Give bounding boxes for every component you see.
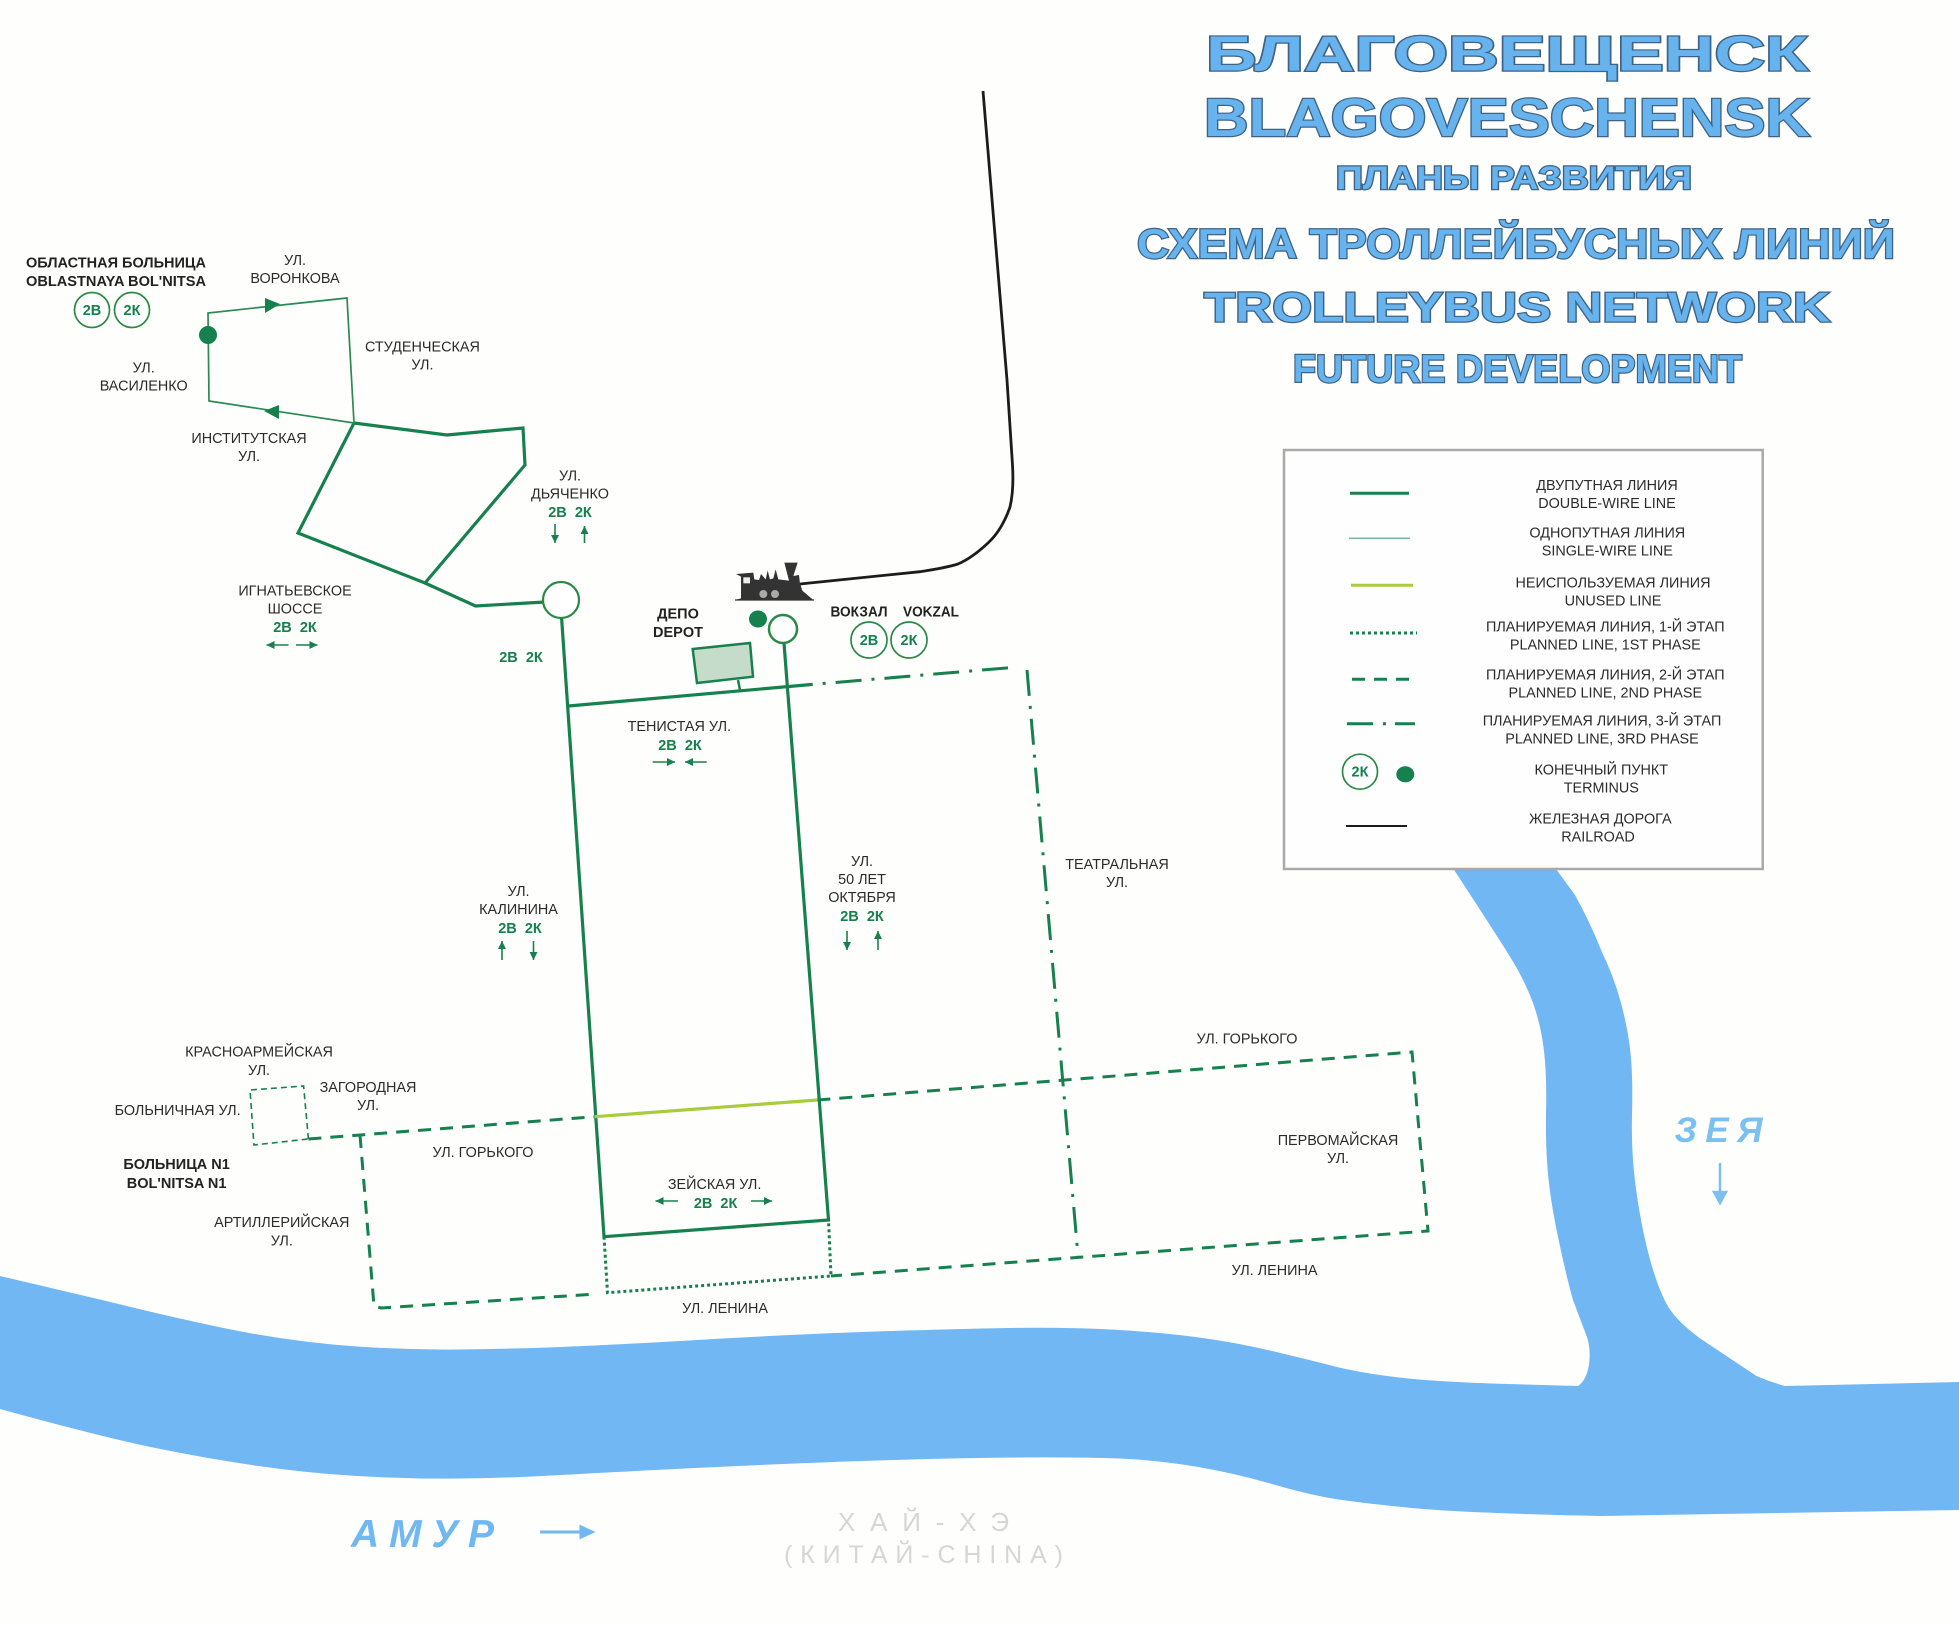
- route badge: 2B at Vokzal: 2В: [860, 633, 878, 649]
- label: Hai-He China: [784, 1507, 1063, 1569]
- route badge: 2B at Vokzal: [851, 622, 887, 658]
- label: Studencheskaya: УЛ.: [411, 358, 433, 374]
- label: Oblastnaya hospital: ОБЛАСТНАЯ БОЛЬНИЦА: [26, 256, 207, 272]
- label: Pervomayskaya: [1278, 1131, 1398, 1167]
- route badge: 2K at hospital: [114, 292, 150, 328]
- title: city name in Russian: БЛАГОВЕЩЕНСК: [1206, 28, 1808, 82]
- label: Depot: [653, 607, 703, 641]
- label: Hospital N1: [123, 1157, 230, 1192]
- planned line 2nd phase: Artilleriyskaya and Lenina west: [360, 1135, 597, 1308]
- terminus circle: Vokzal: [769, 615, 797, 643]
- legend: double-wire line: [1350, 478, 1678, 512]
- legend: unused line: НЕИСПОЛЬЗУЕМАЯ ЛИНИЯ: [1516, 575, 1710, 591]
- legend: single-wire line: ОДНОПУТНАЯ ЛИНИЯ: [1529, 526, 1685, 542]
- legend: railroad: ЖЕЛЕЗНАЯ ДОРОГА: [1529, 811, 1672, 827]
- label: Dyachenko with routes: ДЬЯЧЕНКО: [531, 486, 609, 502]
- route badge: 2B at hospital: 2В: [83, 303, 101, 319]
- legend: single-wire line: [1349, 526, 1685, 559]
- river: Amur and Zeya: [0, 869, 1959, 1516]
- label: Institutskaya: [191, 431, 307, 465]
- heading: network in Russian: СХЕМА ТРОЛЛЕЙБУСНЫХ ЛИНИЙ: [1137, 219, 1895, 267]
- icon: direction arrow on Voronkova: [265, 298, 280, 313]
- label: Pervomayskaya: УЛ.: [1327, 1151, 1349, 1167]
- label: Teatralnaya: УЛ.: [1106, 875, 1128, 891]
- label: Artilleriyskaya: УЛ.: [271, 1234, 293, 1250]
- label: 50 let Oktyabrya with routes: [828, 854, 896, 950]
- legend: terminus: КОНЕЧНЫЙ ПУНКТ: [1535, 760, 1668, 778]
- planned line 2nd phase: Gorkogo east and Pervomayskaya: [817, 1052, 1428, 1276]
- legend: planned line phase 3: PLANNED LINE, 3RD PHASE: [1505, 731, 1699, 747]
- label: Voronkova: [250, 253, 340, 287]
- label: Hospital N1: БОЛЬНИЦА N1: [123, 1157, 230, 1173]
- label: Institutskaya: УЛ.: [238, 449, 260, 465]
- route badge: 2K at hospital: 2К: [124, 303, 141, 319]
- railroad line: [800, 91, 1013, 584]
- label: Zagorodnaya: УЛ.: [357, 1098, 379, 1114]
- label: Dyachenko with routes: УЛ.: [559, 469, 581, 485]
- label: Krasnoarmeyskaya: [185, 1043, 333, 1079]
- legend: terminus: [1342, 754, 1668, 796]
- legend: unused line: UNUSED LINE: [1565, 593, 1661, 609]
- route badge: 2K at Vokzal: 2К: [901, 633, 918, 649]
- planned line 1st phase: Lenina centre: [604, 1220, 831, 1293]
- label: Lenina centre: УЛ. ЛЕНИНА: [682, 1301, 768, 1317]
- title block: [1137, 28, 1895, 391]
- label: Ignatyevskoye highway with routes: 2В 2К: [273, 620, 317, 636]
- title: city name in English: BLAGOVESCHENSK: [1204, 88, 1810, 148]
- legend: terminus: 2К: [1352, 765, 1369, 781]
- label: Hai-He China: ХАЙ-ХЭ: [838, 1507, 1009, 1537]
- label: Kalinina with routes: УЛ.: [507, 884, 530, 900]
- single-wire loop: Oblastnaya hospital: [208, 298, 354, 423]
- legend: unused line: [1351, 575, 1710, 609]
- label: Tenistaya with routes: [628, 719, 731, 762]
- label: Studencheskaya: [365, 340, 480, 374]
- route badge: 2B at hospital: [74, 292, 110, 328]
- subtitle: development plans: ПЛАНЫ РАЗВИТИЯ: [1336, 160, 1692, 196]
- panel: legend: [1284, 450, 1763, 869]
- legend: single-wire line: SINGLE-WIRE LINE: [1542, 543, 1673, 559]
- label: Bolnichnaya: БОЛЬНИЧНАЯ УЛ.: [115, 1103, 241, 1119]
- label: 50 let Oktyabrya with routes: 2В 2К: [840, 909, 884, 925]
- label: Vokzal: VOKZAL: [903, 605, 959, 621]
- label: Vasilenko: ВАСИЛЕНКО: [100, 379, 188, 395]
- label: Depot: ДЕПО: [657, 607, 699, 623]
- legend: planned line phase 2: [1352, 665, 1725, 701]
- legend: planned line phase 2: ПЛАНИРУЕМАЯ ЛИНИЯ, 2-Й ЭТАП: [1486, 665, 1725, 683]
- label: Kalinina with routes: КАЛИНИНА: [479, 902, 558, 918]
- route label on Kalinina upper: 2В 2К: [499, 650, 543, 666]
- legend: railroad: [1346, 811, 1672, 846]
- label: Zeyskaya with routes: ЗЕЙСКАЯ УЛ.: [668, 1175, 761, 1193]
- label: Teatralnaya: ТЕАТРАЛЬНАЯ: [1065, 857, 1169, 873]
- label: Dyachenko with routes: 2В 2К: [548, 505, 592, 521]
- label: Artilleriyskaya: АРТИЛЛЕРИЙСКАЯ: [214, 1213, 349, 1231]
- double-wire loop: north-west network: [298, 423, 525, 583]
- icon: steam locomotive: [735, 563, 814, 600]
- label: Dyachenko with routes: [531, 469, 609, 543]
- heading: network in English: TROLLEYBUS NETWORK: [1204, 284, 1830, 330]
- icon: terminus dot, Oblastnaya hospital: [199, 326, 217, 344]
- label: Tenistaya with routes: 2В 2К: [658, 738, 702, 754]
- legend: planned line phase 1: PLANNED LINE, 1ST PHASE: [1510, 638, 1701, 654]
- label: 50 let Oktyabrya with routes: УЛ.: [851, 854, 873, 870]
- icon: direction arrow on Institutskaya: [264, 405, 279, 419]
- depot building: [693, 643, 753, 683]
- label: Vokzal: ВОКЗАЛ: [830, 605, 888, 621]
- legend: planned line phase 2: PLANNED LINE, 2ND PHASE: [1509, 685, 1702, 701]
- legend: railroad: RAILROAD: [1561, 830, 1635, 846]
- label: Pervomayskaya: ПЕРВОМАЙСКАЯ: [1278, 1131, 1398, 1149]
- label: Voronkova: ВОРОНКОВА: [250, 271, 340, 287]
- legend: double-wire line: DOUBLE-WIRE LINE: [1538, 496, 1676, 512]
- label: Hospital N1: BOL'NITSA N1: [127, 1176, 226, 1192]
- unused line: Gorkogo centre: [594, 1100, 817, 1117]
- label: Zagorodnaya: ЗАГОРОДНАЯ: [320, 1080, 416, 1096]
- double-wire line: Ignatyevskoye highway: [425, 583, 545, 606]
- label: Vasilenko: [100, 361, 188, 395]
- subtitle: future development: FUTURE DEVELOPMENT: [1293, 348, 1742, 391]
- label: Ignatyevskoye highway with routes: [238, 584, 352, 645]
- label: Zeyskaya with routes: 2В 2К: [694, 1196, 737, 1212]
- legend: planned line phase 3: ПЛАНИРУЕМАЯ ЛИНИЯ, 3-Й ЭТАП: [1483, 712, 1721, 730]
- label: Kalinina with routes: 2В 2К: [498, 921, 542, 937]
- double-wire line: Kalinina: [562, 618, 828, 1237]
- label: Krasnoarmeyskaya: УЛ.: [248, 1063, 270, 1079]
- label: Oblastnaya hospital: OBLASTNAYA BOL'NITSA: [26, 274, 207, 290]
- terminus circle: junction Dyachenko: [543, 582, 579, 618]
- label: Artilleriyskaya: [214, 1213, 349, 1250]
- legend: terminus: TERMINUS: [1564, 780, 1639, 796]
- route badge: 2K at Vokzal: [891, 622, 927, 658]
- planned line 3rd phase: Tenistaya east and Teatralnaya: [813, 667, 1018, 684]
- legend: planned line phase 1: ПЛАНИРУЕМАЯ ЛИНИЯ, 1-Й ЭТАП: [1486, 618, 1725, 636]
- depot connector: [738, 680, 740, 690]
- legend: planned line phase 1: [1350, 618, 1725, 654]
- arrow: Amur flow: [540, 1527, 592, 1537]
- label: Vasilenko: УЛ.: [133, 361, 155, 377]
- label: Kalinina with routes: [479, 884, 558, 960]
- label: Hai-He China: (КИТАЙ-CHINA): [784, 1539, 1063, 1569]
- legend: planned line phase 3: [1347, 712, 1721, 747]
- label: Oblastnaya hospital: [26, 256, 207, 290]
- label: Zagorodnaya: [320, 1080, 416, 1114]
- label: Institutskaya: ИНСТИТУТСКАЯ: [191, 431, 307, 447]
- label: Gorkogo east: УЛ. ГОРЬКОГО: [1197, 1032, 1297, 1048]
- legend: double-wire line: ДВУПУТНАЯ ЛИНИЯ: [1536, 478, 1678, 494]
- label: Gorkogo west: УЛ. ГОРЬКОГО: [433, 1145, 533, 1161]
- label: Zeyskaya with routes: [656, 1175, 772, 1212]
- planned line 2nd phase: Gorkogo west: [308, 1117, 594, 1139]
- planned line 3rd phase: Teatralnaya: [1027, 670, 1078, 1256]
- label: river Zeya: ЗЕЯ: [1674, 1111, 1764, 1150]
- label: Tenistaya with routes: ТЕНИСТАЯ УЛ.: [628, 719, 731, 735]
- label: Teatralnaya: [1065, 857, 1169, 891]
- label: Ignatyevskoye highway with routes: ШОССЕ: [268, 602, 322, 618]
- label: 50 let Oktyabrya with routes: ОКТЯБРЯ: [828, 890, 896, 906]
- double-wire line: Tenistaya: [568, 684, 813, 706]
- label: Studencheskaya: СТУДЕНЧЕСКАЯ: [365, 340, 480, 356]
- label: 50 let Oktyabrya with routes: 50 ЛЕТ: [838, 872, 886, 888]
- label: Lenina east: УЛ. ЛЕНИНА: [1232, 1263, 1318, 1279]
- terminus dot: Vokzal: [749, 610, 767, 628]
- arrow: Zeya flow: [1714, 1163, 1726, 1203]
- label: Ignatyevskoye highway with routes: ИГНАТЬЕВСКОЕ: [238, 584, 352, 600]
- label: Voronkova: УЛ.: [284, 253, 306, 269]
- label: river Amur: АМУР: [350, 1513, 495, 1556]
- label: Vokzal: [830, 605, 959, 621]
- label: Krasnoarmeyskaya: КРАСНОАРМЕЙСКАЯ: [185, 1043, 333, 1061]
- label: Depot: DEPOT: [653, 625, 703, 641]
- planned thin loop: Hospital N1: [250, 1086, 308, 1145]
